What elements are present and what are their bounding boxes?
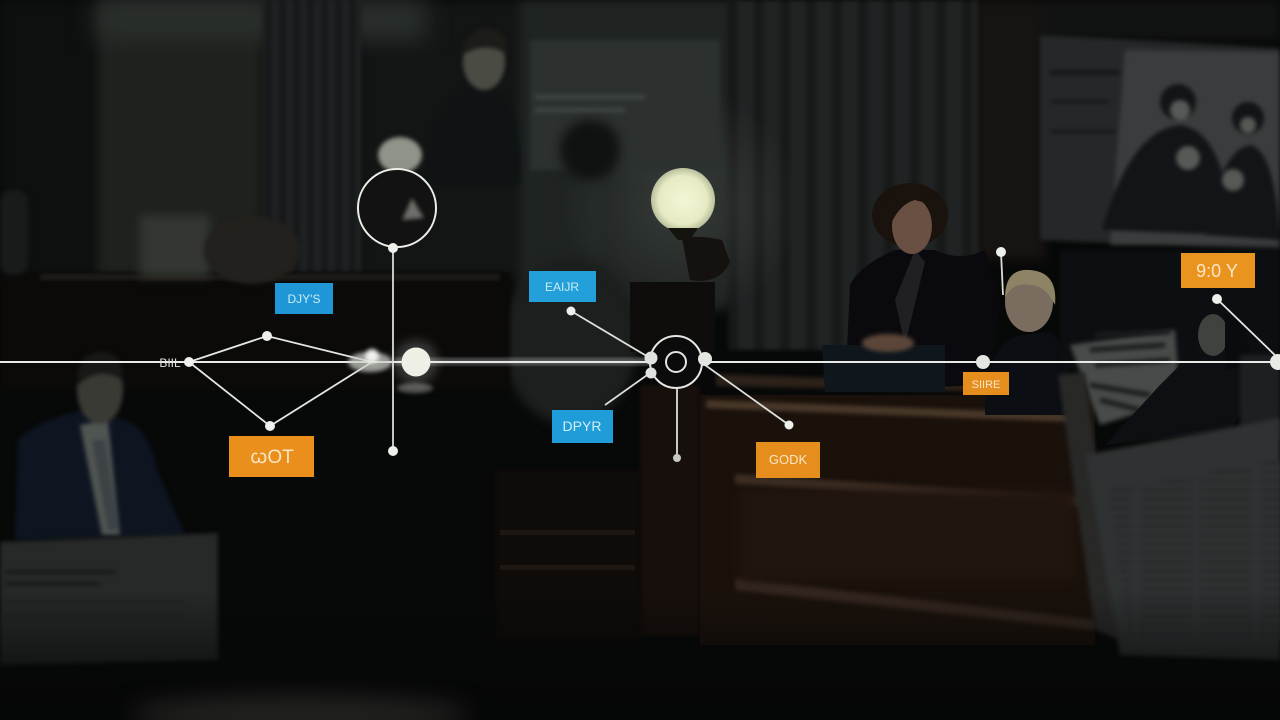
connector: blonde witness marker	[996, 247, 1006, 295]
label: blue DPYR: DPYR	[563, 418, 601, 434]
curtain: right	[728, 0, 978, 350]
node: timeline right	[976, 355, 990, 369]
connector: vertical with ring	[358, 169, 436, 456]
soft shape behind center	[502, 255, 638, 425]
bench top left	[0, 272, 510, 392]
label: orange GODK	[756, 442, 820, 478]
vignette: bottom fade	[0, 590, 1280, 720]
lamp glow	[560, 85, 800, 325]
figure: blonde woman	[985, 270, 1072, 415]
event cluster: diamond connectors	[189, 336, 372, 426]
figure: woman judge	[822, 183, 1000, 392]
document: right paper	[1058, 372, 1280, 660]
curtain: left	[262, 0, 362, 275]
timeline: main axis	[0, 358, 1280, 365]
label: orange SIIRE: SIIRE	[972, 379, 1000, 391]
label: blue EAIJR	[529, 271, 596, 302]
label: orange WOT: ꞷOT	[250, 447, 294, 468]
node: diamond top	[262, 331, 272, 341]
label: orange 9:0Y: 9:0 Y	[1196, 261, 1238, 281]
label: orange SIIRE	[963, 372, 1009, 395]
label: blue DJY'S: DJY'S	[288, 292, 320, 306]
burst: light splash	[348, 349, 433, 393]
lamp: small left	[378, 137, 422, 173]
node: start	[184, 357, 194, 367]
portrait group	[1102, 84, 1280, 240]
label: blue EAIJR: EAIJR	[545, 280, 579, 294]
label: orange 9:0Y	[1181, 253, 1255, 288]
label: start marker: BIIL	[159, 356, 181, 370]
newspaper: right dark	[1060, 250, 1280, 445]
label: orange WOT	[229, 436, 314, 477]
label: orange GODK: GODK	[769, 452, 807, 467]
node: diamond bottom	[265, 421, 275, 431]
connector: top right marker	[1212, 294, 1280, 370]
witness stand: wood panels	[495, 374, 1095, 645]
hub: central target with connectors	[566, 306, 794, 462]
lamp: wall light	[630, 168, 730, 352]
newspaper: top right	[1040, 35, 1280, 250]
figure: man bottom left	[15, 352, 185, 540]
label: blue DPYR	[552, 410, 613, 443]
document: top centre	[530, 40, 720, 180]
figure: man at top centre	[425, 28, 520, 185]
document: bottom left paper	[0, 533, 218, 665]
label: blue DJY'S	[275, 283, 333, 314]
node: large glowing	[394, 340, 438, 384]
